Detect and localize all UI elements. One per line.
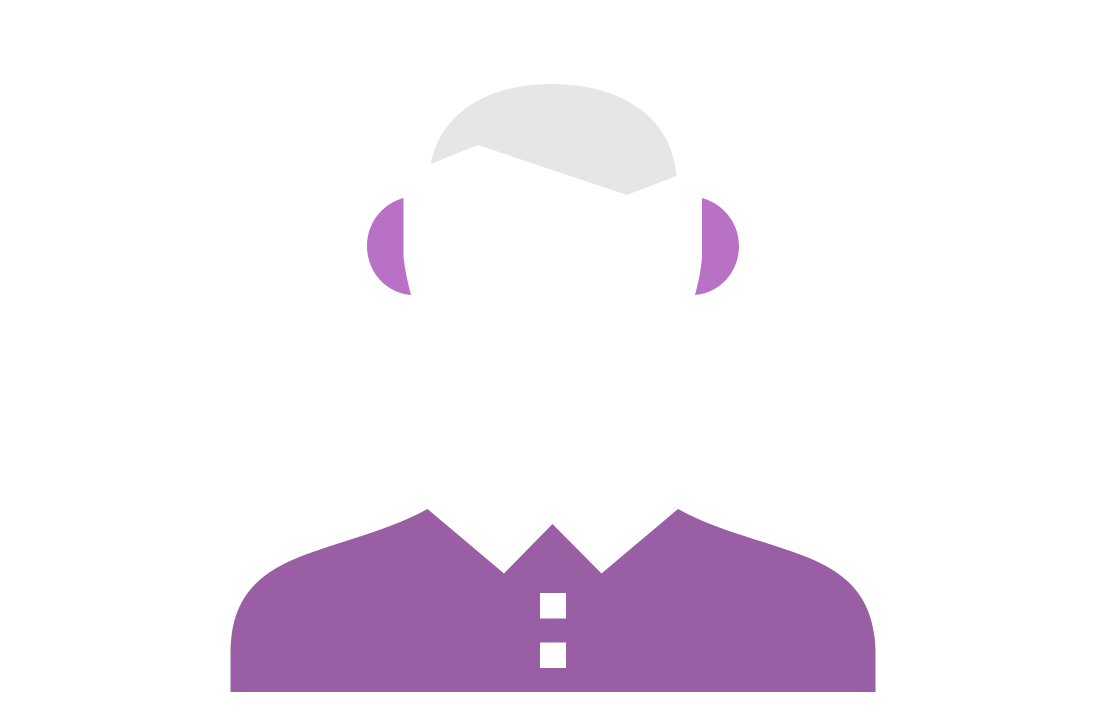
icon: left ear [367,198,411,295]
icon: hair [430,84,676,195]
icon: shirt button top [540,593,566,618]
icon: shirt button bottom [540,642,566,668]
icon: shirt with collar [230,509,876,692]
icon: right ear [695,198,739,295]
